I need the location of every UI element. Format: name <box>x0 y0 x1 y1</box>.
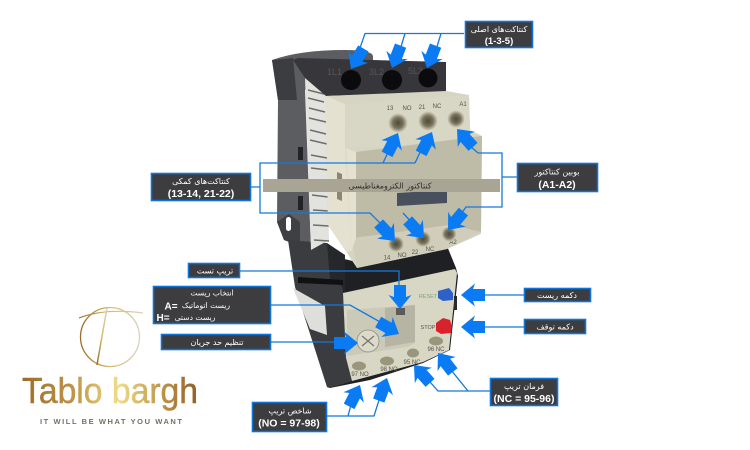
contactor device photo: 14 <box>384 256 391 262</box>
callout: contactor coil <box>518 164 598 192</box>
contactor device photo: 96 NC <box>427 347 445 353</box>
callout: stop button: دکمه توقف <box>536 322 574 332</box>
arrows: trip indicator <box>339 374 398 412</box>
contactor device photo: NO <box>402 106 412 112</box>
logo wordmark: Tablo bargh <box>22 370 198 411</box>
arrows: trip command <box>405 346 462 391</box>
callout: trip command <box>490 378 558 406</box>
callout: reset button <box>524 288 590 302</box>
callout: stop button <box>524 320 586 334</box>
callout: main contacts: کنتاکت‌های اصلی <box>471 25 527 34</box>
contactor device photo: 3L2 <box>369 67 384 77</box>
callout: main contacts: (1-3-5) <box>485 36 513 47</box>
logo: Tablo bargh <box>22 308 198 426</box>
contactor device photo: NO <box>398 253 407 259</box>
side specification label <box>305 78 329 250</box>
arrows: main contacts <box>341 41 446 75</box>
overload relay body <box>327 246 458 388</box>
arrow: reset selection <box>372 312 405 344</box>
callout: reset selection <box>154 286 270 324</box>
contactor device photo: 21 <box>419 105 426 111</box>
callout: reset selection: H= <box>156 313 170 324</box>
contactor device photo: 13 <box>387 106 394 112</box>
callout: main contacts <box>466 22 532 48</box>
contactor device photo: 5L3 <box>408 66 423 76</box>
callout: reset selection: انتخاب ریست <box>190 288 234 298</box>
auxiliary terminal holes <box>388 114 408 132</box>
callout: reset button: دکمه ریست <box>537 291 577 300</box>
contactor device photo: RESET <box>419 294 438 300</box>
contactor device photo: 98 NO <box>380 367 398 373</box>
callout: contactor coil: (A1-A2) <box>538 179 576 191</box>
callout: trip indicator: (NO = 97-98) <box>258 418 320 430</box>
band title: electromagnetic contactor: کنتاکتور الکترومغناطیسی <box>348 182 432 190</box>
overload side label <box>293 288 327 335</box>
arrows: auxiliary contacts top <box>377 127 442 160</box>
main terminal block <box>293 58 446 96</box>
main terminal holes <box>341 70 361 90</box>
callout: auxiliary contacts: (13-14, 21-22) <box>168 188 234 200</box>
overload relay face <box>343 269 457 381</box>
contactor device photo: 1L1 <box>327 67 342 77</box>
callout: contactor coil: بوبین کنتاکتور <box>534 168 579 176</box>
arrow: stop button <box>461 316 485 338</box>
grey title band <box>263 179 500 192</box>
callout: trip test: تریپ تست <box>197 266 233 276</box>
callout: auxiliary contacts: کنتاکت‌های کمکی <box>172 177 230 186</box>
arrows: coil terminals <box>439 121 482 237</box>
contactor device photo <box>272 50 482 388</box>
callout: reset selection: ریست اتوماتیک <box>182 301 230 310</box>
logo emblem <box>79 308 143 366</box>
callout: trip command: فرمان تریپ <box>504 382 544 391</box>
stop button <box>436 318 452 334</box>
arrows: auxiliary contacts bottom <box>370 213 432 249</box>
contactor device photo: A1 <box>459 102 467 108</box>
contactor device photo: STOP <box>421 325 436 331</box>
callout: current limit setting <box>162 334 270 350</box>
overload terminals <box>352 336 443 370</box>
contactor device photo: A2 <box>449 240 457 246</box>
arrow: reset button <box>461 284 485 306</box>
callout: trip indicator: شاخص تریپ <box>268 406 312 416</box>
callout: reset selection: A= <box>164 302 178 312</box>
auxiliary block <box>326 91 482 268</box>
callout: auxiliary contacts <box>152 174 250 200</box>
contactor device photo: 97 NO <box>351 372 369 378</box>
contactor device photo: 22 <box>412 250 419 256</box>
callout: current limit setting: تنظیم حد جریان <box>190 338 244 347</box>
contactor device photo: NC <box>426 247 435 253</box>
contactor device photo: 95 NC <box>403 360 421 366</box>
callout: trip indicator <box>252 402 326 432</box>
reset button <box>438 288 453 301</box>
callout: trip test <box>188 264 240 278</box>
logo tagline: IT WILL BE WHAT YOU WANT <box>40 417 182 426</box>
arrow: current setting <box>334 332 358 354</box>
arrow: trip test <box>388 285 412 309</box>
connector lines <box>240 34 524 416</box>
callout: reset selection: ریست دستی <box>175 313 216 322</box>
contactor device photo: NC <box>433 104 442 110</box>
callout: trip command: (NC = 95-96) <box>494 393 554 405</box>
contactor back housing <box>272 50 373 250</box>
